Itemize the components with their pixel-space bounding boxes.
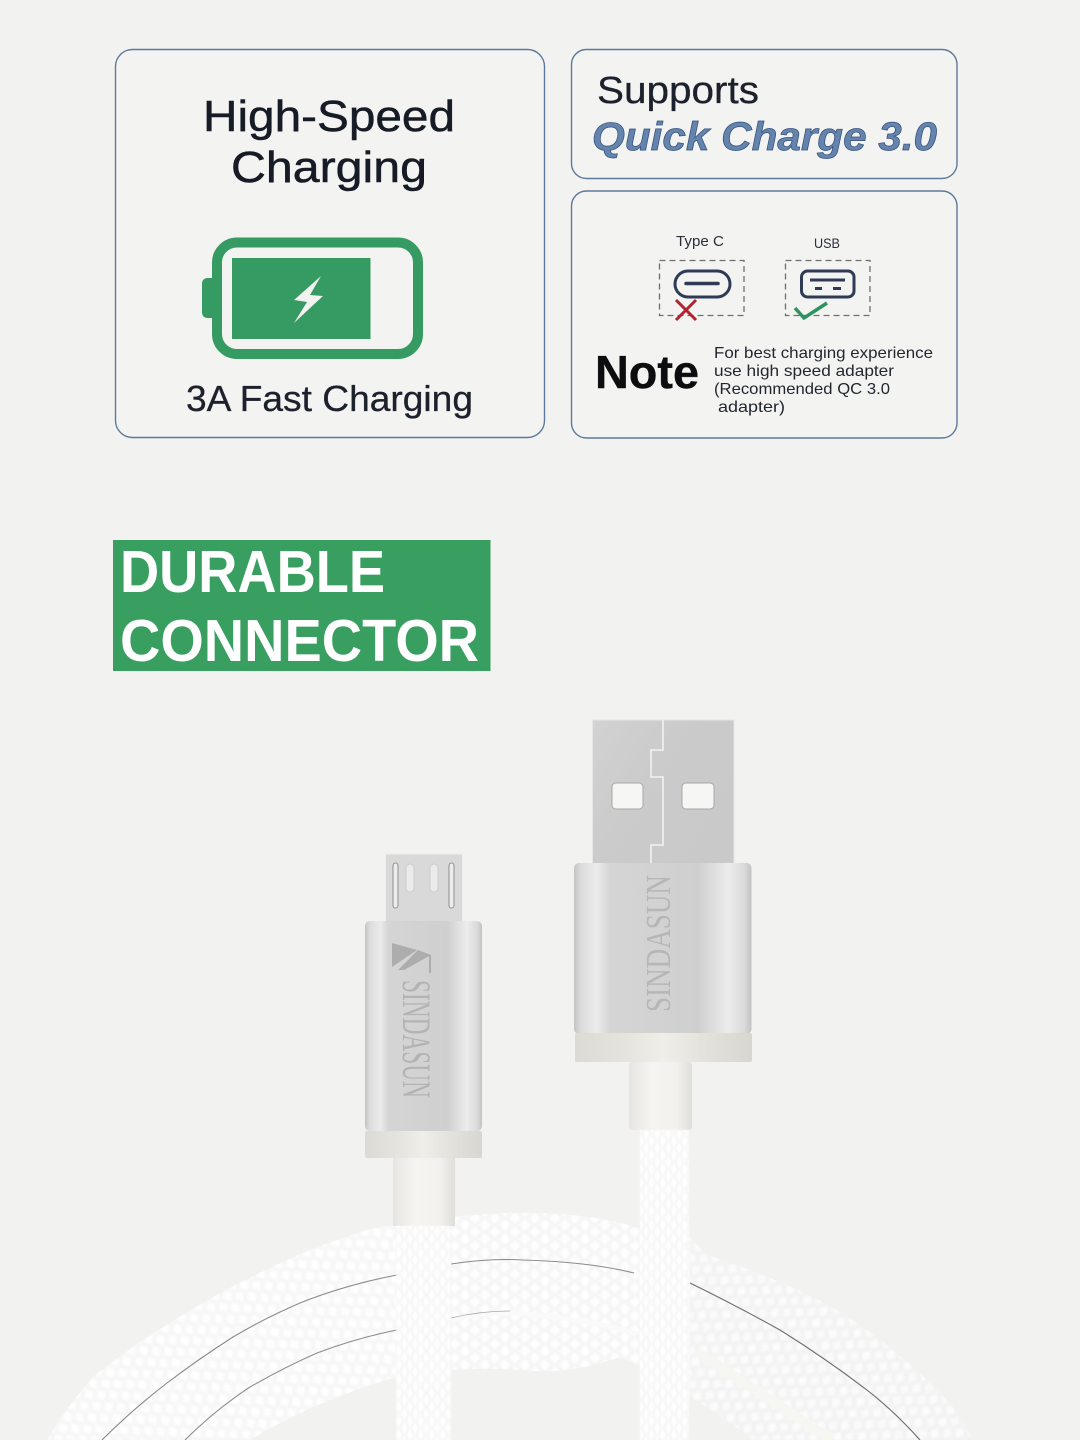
text: note: Note (595, 346, 699, 398)
connector: micro usb (365, 854, 482, 1226)
icon: usb supported (786, 235, 870, 318)
connector: usb a (574, 720, 752, 1130)
banner: durable connector (113, 539, 490, 674)
cable: micro usb strand (396, 1226, 451, 1440)
text: supports: Supports (597, 70, 759, 112)
usb a collar (575, 1033, 752, 1062)
micro usb sleeve (393, 1158, 455, 1226)
panel: quick charge (572, 50, 957, 178)
cable: usb a strand (640, 1130, 689, 1440)
micro usb logo (392, 943, 431, 973)
micro usb housing (365, 921, 482, 1131)
micro usb collar (365, 1131, 482, 1158)
usb a engraving: SINDASUN (639, 875, 678, 1012)
micro usb engraving: SINDASUN (394, 980, 439, 1098)
text: note details: adapter) (718, 399, 785, 416)
heading: high-speed charging: Charging (231, 143, 427, 192)
text: note details: use high speed adapter (714, 363, 895, 380)
micro usb metal tip (386, 854, 462, 922)
text: note details: For best charging experience (714, 345, 933, 362)
coiled braided cable (48, 1213, 970, 1440)
panel: note (572, 191, 957, 438)
usb a housing (574, 863, 752, 1034)
text: note details (714, 345, 933, 416)
heading: high-speed charging (203, 92, 455, 192)
text: quick charge 3.0: Quick Charge 3.0 (592, 115, 937, 159)
usb a sleeve (629, 1062, 692, 1130)
banner: durable connector: DURABLE (120, 539, 385, 605)
text: note details: (Recommended QC 3.0 (714, 381, 890, 398)
icon: battery (202, 242, 418, 354)
caption: 3A fast charging: 3A Fast Charging (186, 378, 473, 419)
heading: high-speed charging: High-Speed (203, 92, 455, 141)
panel: high-speed charging (116, 50, 544, 438)
icon: type c not supported: Type C (676, 234, 724, 250)
icon: usb supported: USB (814, 235, 840, 251)
banner: durable connector: CONNECTOR (120, 608, 479, 674)
icon: type c not supported (660, 234, 744, 320)
usb a metal plate (592, 720, 734, 864)
